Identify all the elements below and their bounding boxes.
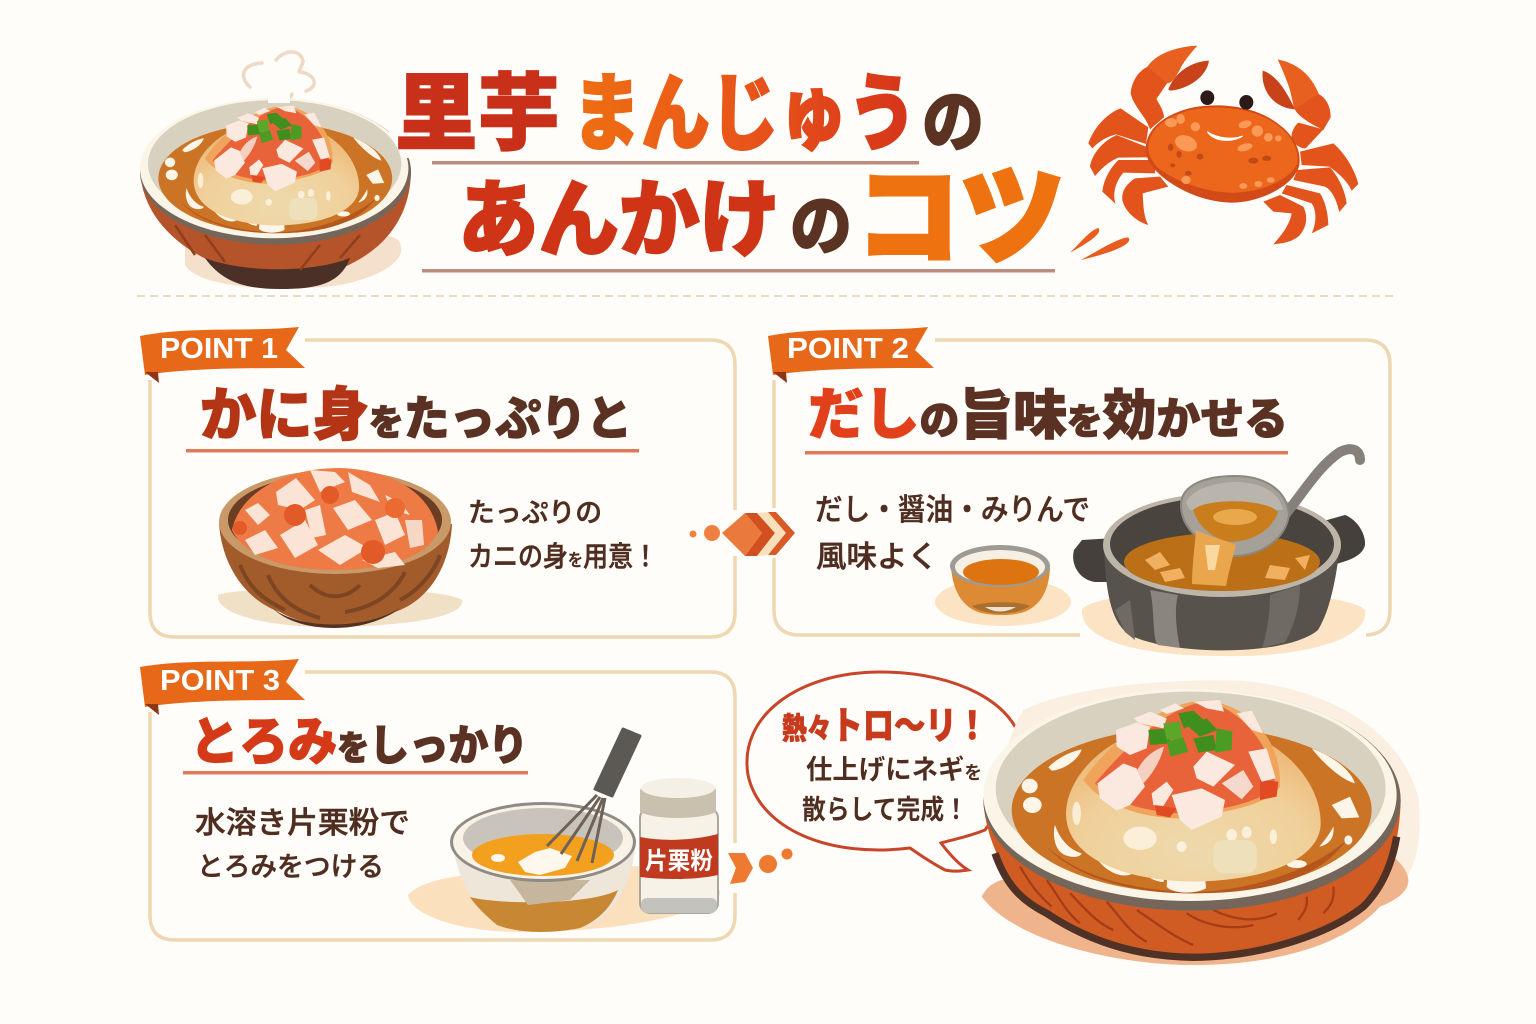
badge: point 1 bbox=[140, 327, 305, 383]
callout: speech bubble: 熱々トロ〜リ！ bbox=[782, 706, 988, 748]
badge: point 2: POINT 2 bbox=[787, 333, 909, 365]
callout: speech bubble: 散らして完成！ bbox=[802, 795, 968, 825]
illustration: small bowl with satoimo manju bbox=[140, 92, 414, 289]
illustration: glass bowl with whisk bbox=[408, 729, 720, 932]
panel: point 3 bbox=[140, 659, 735, 940]
badge: point 3: POINT 3 bbox=[160, 665, 280, 697]
title bbox=[395, 67, 1064, 278]
icon: steam bbox=[244, 52, 314, 103]
title: あんかけ bbox=[458, 173, 780, 267]
title: の bbox=[790, 189, 852, 263]
text: point 1 description: カニの身を用意！ bbox=[468, 541, 658, 572]
illustration: potato starch jar: 片栗粉 bbox=[645, 848, 713, 875]
title: 里芋 bbox=[395, 67, 560, 161]
illustration: pot with ladle bbox=[1073, 449, 1365, 656]
text: point 3 description: とろみをつける bbox=[197, 852, 384, 882]
illustration: large finished dish bbox=[982, 680, 1420, 965]
text: point 3 description: 水溶き片栗粉で bbox=[195, 807, 410, 840]
callout: speech bubble: 仕上げにネギを bbox=[806, 755, 982, 785]
title: コツ bbox=[856, 157, 1064, 278]
illustration: wooden bowl of crab meat bbox=[218, 468, 462, 628]
heading: point 2: だしの旨味を効かせる bbox=[808, 383, 1288, 446]
title: の bbox=[922, 85, 984, 161]
panel: point 1 bbox=[140, 327, 735, 637]
badge: point 1: POINT 1 bbox=[160, 333, 278, 365]
icon: crab bbox=[1070, 46, 1358, 260]
text: point 3 description bbox=[195, 807, 410, 882]
heading: point 3: とろみをしっかり bbox=[190, 714, 528, 772]
text: point 2 description: 風味よく bbox=[816, 541, 938, 574]
panel: point 2 bbox=[768, 327, 1390, 656]
text: point 1 description: たっぷりの bbox=[468, 498, 602, 528]
title: まんじゅう bbox=[572, 67, 917, 161]
illustration: potato starch jar bbox=[640, 778, 718, 913]
arrow: point 1 to point 2 bbox=[690, 512, 795, 556]
text: point 2 description bbox=[815, 494, 1090, 574]
badge: point 2 bbox=[768, 327, 934, 383]
heading: point 1: かに身をたっぷりと bbox=[200, 383, 632, 448]
illustration: small cup of broth bbox=[935, 545, 1071, 626]
badge: point 3 bbox=[140, 659, 305, 715]
dashed divider bbox=[137, 295, 1395, 297]
callout: speech bubble bbox=[747, 672, 1022, 871]
text: point 1 description bbox=[468, 498, 658, 572]
arrow: dots from point 3 to result bbox=[728, 848, 792, 884]
text: point 2 description: だし・醤油・みりんで bbox=[815, 494, 1090, 527]
